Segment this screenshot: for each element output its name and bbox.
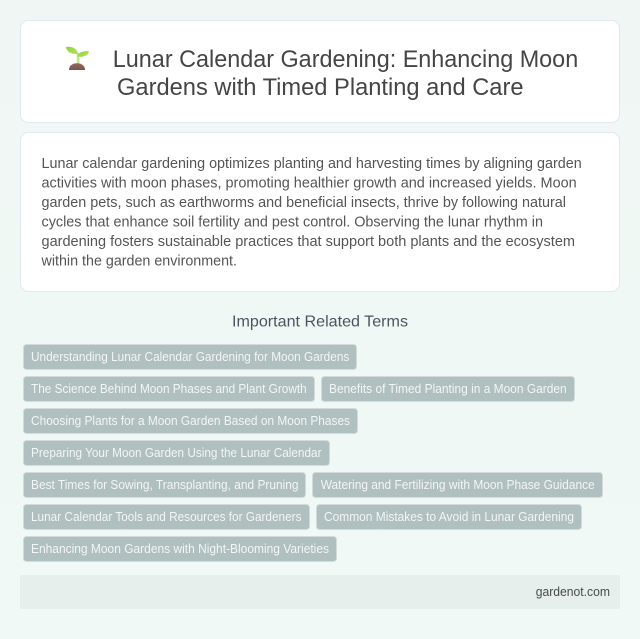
paragraph text: gardening fosters sustainable practices that support both plants and the ecosystem [42, 234, 575, 250]
panel: title header [20, 20, 620, 122]
footer [20, 575, 620, 609]
paragraph text: within the garden environment. [41, 254, 237, 270]
panel: intro paragraph [20, 132, 620, 292]
heading: important related terms: Important Related Terms [232, 314, 408, 331]
tag: preparing [24, 440, 330, 466]
tag: watering: Watering and Fertilizing with Moon Phase Guidance [321, 477, 595, 492]
title text: Lunar Calendar Gardening: Enhancing Moon [113, 46, 578, 73]
tag: choosing plants: Choosing Plants for a Moon Garden Based on Moon Phases [31, 413, 350, 428]
icon: sprout [66, 47, 89, 70]
tag: tools: Lunar Calendar Tools and Resources for Gardeners [31, 509, 302, 524]
tag: mistakes: Common Mistakes to Avoid in Lunar Gardening [324, 509, 574, 524]
footer source text: gardenot.com [536, 584, 610, 599]
tag: tools [24, 504, 310, 530]
paragraph text: cycles that enhance soil fertility and pest control. Observing the lunar rhythm in [42, 214, 543, 230]
paragraph text: Lunar calendar gardening optimizes planting and harvesting times by aligning garden [42, 156, 582, 172]
paragraph text [41, 156, 582, 270]
tag: science [24, 376, 314, 402]
tag: understanding: Understanding Lunar Calendar Gardening for Moon Gardens [31, 349, 349, 364]
tag: night-blooming [24, 536, 336, 562]
title text [113, 46, 578, 101]
title text: Gardens with Timed Planting and Care [117, 74, 524, 101]
tag: preparing: Preparing Your Moon Garden Using the Lunar Calendar [31, 445, 322, 460]
tag: night-blooming: Enhancing Moon Gardens with Night-Blooming Varieties [31, 541, 329, 556]
tag: benefits: Benefits of Timed Planting in a Moon Garden [329, 381, 567, 396]
paragraph text: garden pets, such as earthworms and beneficial insects, thrive by following natural [42, 195, 566, 211]
tag: mistakes [316, 504, 582, 530]
tag: best times [24, 472, 306, 498]
tag: best times: Best Times for Sowing, Transplanting, and Pruning [31, 477, 298, 492]
tag: watering [312, 472, 602, 498]
tag: choosing plants [24, 408, 358, 434]
tag list [24, 344, 602, 562]
tag: understanding [24, 344, 356, 370]
paragraph text: activities with moon phases, promoting healthier growth and increased yields. Moon [42, 176, 577, 192]
tag: science: The Science Behind Moon Phases and Plant Growth [31, 381, 307, 396]
tag: benefits [322, 376, 574, 402]
